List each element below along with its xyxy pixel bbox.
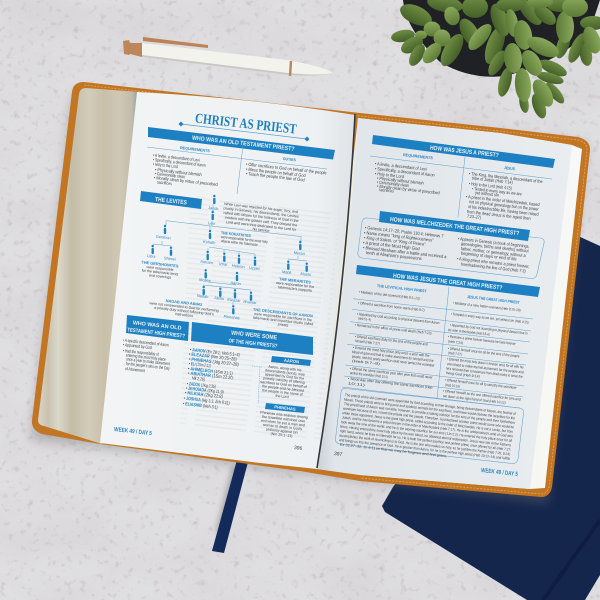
table: levitical vs jesus: he's removed their consciences from dead works to serve the	[446, 367, 523, 379]
table: requirements and duties: • Physically without blemish	[155, 167, 202, 177]
family tree of Levi: Hebron	[232, 263, 245, 269]
panel: melchizedek box: HOW WAS MELCHIZEDEK THE GREAT HIGH PRIEST?	[390, 217, 520, 237]
note: nadab and abihu: NADAB AND ABIHU	[166, 298, 203, 307]
list: high priests: • JEHOIADA (2Kg 11:9)	[186, 386, 224, 395]
table: levitical vs jesus: • Mediator of a new, better covenant (Heb 9:15–28)	[453, 301, 521, 312]
family tree of Levi: Amram	[200, 259, 213, 265]
panel: note box: Moses. These priests were to bring pure and spotless animals for the sacrifices, and these would cleanse the Israelites for the	[344, 398, 515, 420]
table: requirements and jesus: • The King, the Messiah, a descendant of the	[469, 171, 543, 184]
panel: aaron: appointed by God for the	[265, 372, 304, 381]
table: levitical vs jesus: 10:11)	[348, 382, 365, 387]
family tree of Levi: Jacob	[208, 205, 219, 211]
panel: aaron: AARON	[284, 358, 299, 364]
list: high priests: • HILKIAH (2Kg 22:8)	[185, 390, 223, 399]
table: requirements and jesus: • Ceremonially clean	[377, 180, 409, 188]
table: requirements and jesus: sacrifices	[379, 187, 395, 194]
table: requirements and duties: • Teach the people the law of God	[246, 171, 305, 183]
list: high priests: • ELI (1Sm 2:11)	[189, 361, 211, 368]
panel: left page content	[114, 112, 335, 452]
list: high priests: • ELEAZAR (Nm 20:25–28)	[189, 352, 237, 362]
list: high priest duties	[123, 338, 171, 373]
table: requirements and jesus: • Tested in every way as we are	[472, 186, 522, 197]
table: requirements and jesus: • Physically without blemish	[377, 176, 424, 186]
table: levitical vs jesus: people, and this yearly sacrifice could never perfect the worshiper	[352, 355, 435, 368]
note: merarites: THE MERARITES	[279, 276, 311, 285]
panel: note box: Ex 32:27–32; Jn 4:1) so that we may be forgiven and find grace.	[340, 443, 448, 458]
plant pot	[403, 0, 600, 77]
banner: old testament high priest	[126, 315, 189, 341]
panel: melchizedek box: • Blessed Abraham after a battle and received a	[363, 245, 447, 259]
family tree of Levi: Mahli	[282, 269, 292, 275]
panel: note box: right hand, where he lives to intercede for us. He is both the perfect sacrifice and perfect priest, once offered for all (Heb 7:27;	[340, 429, 511, 452]
table: levitical vs jesus: perfect the worshiper (Heb 10:1)	[350, 371, 388, 379]
list: high priests: Mk 2:26)	[192, 376, 205, 382]
table: levitical vs jesus: • Entered the most holy place in heaven once for all with his	[447, 357, 524, 369]
family tree of Levi: Uzziel	[249, 265, 260, 271]
footer: right: WEEK 49 / DAY 5	[481, 468, 519, 478]
table: levitical vs jesus: • Offered a sacrifice from home users (Heb 9:7)	[358, 301, 425, 312]
panel: melchizedek box: foreshadowing the line of God (Heb 7:3)	[461, 262, 526, 274]
list: high priests: • JOSHUA (Hg 1:1; Zch 6:11)	[184, 396, 230, 406]
page number: left: 396	[294, 445, 303, 452]
panel: note box: The priests of the old covenant were appointed by God according to their lineage, being descendants of Moses, the brother of	[345, 393, 516, 416]
note: kohathites	[221, 230, 268, 247]
table: levitical vs jesus: JESUS THE GREAT HIGH PRIEST	[467, 294, 520, 305]
table: levitical vs jesus: (Heb 7:24)	[448, 340, 463, 345]
panel: note box: took away the sins of the world, and he is the atoning sacrifice for our sins (1Jn 2:2). He entered the holy place once for all	[341, 420, 512, 443]
table: requirements and jesus: • Holy to the Lord	[375, 171, 405, 179]
table: requirements and duties: • Ceremonially clean	[155, 171, 185, 179]
panel: phinehas: woman to death in God's	[263, 423, 303, 431]
banner: who were high priests	[191, 322, 313, 355]
title rule with diamonds	[178, 122, 310, 142]
panel: aaron: priestly ministry of offering	[263, 376, 305, 385]
table: requirements and duties: • Morally clean by virtue of prescribed	[154, 175, 218, 187]
list: high priest duties: • A specific descendant of Aaron	[123, 338, 169, 348]
panel: aaron: the Lord	[275, 394, 289, 399]
note: kohathites: objects within the Tabernacle	[221, 239, 258, 247]
panel: melchizedek box: • A king-priest who remains a priest forever,	[457, 256, 530, 269]
panel: phinehas: evil when he put a man and	[261, 419, 305, 427]
panel: melchizedek box: • Appears in Genesis (a book of beginnings,	[458, 236, 530, 249]
panel: melchizedek box: • Name means "king of Righteousness"	[364, 230, 434, 243]
panel: melchizedek box: father, mother, or genealogy, without a	[461, 246, 526, 258]
family tree of Levi	[147, 196, 311, 320]
note: descendants of aaron: tabernacle and important rituals called	[253, 316, 313, 326]
panel: melchizedek box: beginning of days or end of life	[461, 251, 517, 262]
panel: note box: unlike those appointed. Jesus is the great high priest, called according to the order of Melchizedek. He is not a Levite, but from	[342, 411, 513, 434]
paragraph: levites: his service	[252, 227, 270, 233]
left page	[100, 92, 355, 469]
family tree of Levi: Mushi	[300, 271, 311, 277]
banner: the levites	[140, 191, 202, 209]
list: high priest duties: entering the most holy place	[126, 353, 166, 362]
book cover: orange leather	[32, 82, 590, 497]
ribbon bookmark	[212, 460, 248, 553]
banner: great high priest	[356, 265, 540, 297]
table: requirements and duties: DUTIES	[283, 156, 297, 162]
paragraph: levites: cruelty in Genesis, his descendants, the Levites	[223, 206, 299, 219]
table: requirements and jesus: of his indestructible life, having been raised	[468, 204, 539, 217]
note: descendants of aaron	[253, 307, 313, 328]
family tree of Levi: Izhar	[219, 261, 229, 267]
table: requirements and jesus: • A levite, a descendant of Levi	[375, 161, 427, 172]
family tree of Levi: Libni	[147, 253, 156, 259]
panel: melchizedek box: • Genesis 14:17–20; Psalm 110:4; Hebrews 7	[365, 225, 444, 239]
panel: melchizedek box: • King of Salem, or "King of Peace"	[364, 235, 426, 247]
panel: phinehas: Phinehas was zealous among	[260, 410, 308, 420]
panel: melchizedek box: tenth of Abraham's possessions	[366, 250, 423, 261]
family tree of Levi: Levi	[208, 220, 216, 226]
note: kohathites: were responsible for the most holy	[221, 235, 268, 244]
table: levitical vs jesus: • Offered sacrifices daily for the sins of the people and	[355, 335, 428, 346]
panel: note box: Judah, and he has become a priest forever in the order of Melchizedek (Heb 7:17). He is the unblemished Lamb of God who	[342, 416, 513, 438]
family tree of Levi: Aaron	[230, 280, 241, 286]
banner: who were high priests: OF THE HIGH PRIESTS?	[228, 338, 278, 350]
family tree of Levi: Ithamar	[243, 299, 258, 305]
panel: right page content	[334, 135, 555, 478]
table: levitical vs jesus: (Heb 5:1–4)	[358, 317, 371, 322]
table: requirements and jesus: • Specifically, a descendant of Aaron	[375, 166, 435, 178]
paragraph: levites: incident with the golden calf. They obeyed the	[225, 216, 297, 227]
family tree of Levi: Abihu	[214, 295, 225, 301]
family tree of Levi: Eleazar	[227, 297, 242, 303]
dashed connector lines	[252, 366, 263, 404]
panel: aaron: descendants (sons), was	[265, 368, 305, 377]
footer: left: WEEK 49 / DAY 5	[114, 427, 153, 437]
list: high priest duties: once a year to make atonement	[126, 357, 171, 366]
panel: aaron: the people in the name of	[262, 388, 303, 397]
table: requirements and duties	[147, 138, 327, 194]
panel: melchizedek box	[358, 211, 544, 279]
list: high priest duties: of Atonement	[125, 366, 146, 373]
list: high priest duties: • Appointed by God	[123, 342, 152, 350]
table: requirements and duties: • Holy to the Lord	[153, 162, 178, 169]
list: high priests: • AARON (Ex 28:1; Heb 5:1–4)	[190, 347, 240, 358]
panel: phinehas: (Nm 25:1–13)	[270, 432, 293, 438]
table: levitical vs jesus: • Offered the same sacrifices year after year that could never	[350, 367, 433, 380]
panel: note box: accomplishes the work of reconciling us to God. He is the one who makes us holy, so he justifies the Father (Heb 7:25; 9:24)	[339, 434, 510, 456]
list: high priests: • AHIMELECH (1Sm 21:1)	[188, 366, 233, 376]
table: levitical vs jesus: the order of Melchizedek (Heb 5:5–6)	[448, 328, 490, 337]
table: levitical vs jesus: • Appointed by God according to physical descent from Aaron	[357, 312, 440, 325]
panel: note box: and brings us into the presence of God. He is greater than Aaron, for he is the perfect high priest (Heb 10:12–14) and fulfills	[339, 438, 510, 461]
list: high priest duties: for the people's sins on the Day	[126, 361, 171, 371]
table: requirements and jesus: 7:23–27)	[467, 214, 482, 220]
note: gershonites	[141, 259, 179, 280]
table: levitical vs jesus: • Offered himself once for all to sanctify the worshiper	[445, 378, 517, 390]
right page	[317, 118, 572, 489]
panel: note box	[335, 388, 524, 464]
table: levitical vs jesus: (Heb 10:10)	[445, 383, 460, 389]
note: merarites: tabernacle's supports	[278, 285, 312, 293]
banner: old testament priest	[148, 127, 335, 160]
table: levitical vs jesus: • Entered the most holy place only once a year with the	[353, 346, 430, 358]
table: requirements and jesus: not on physical genealogy but on the power	[469, 199, 539, 212]
note: kohathites: THE KOHATHITES	[221, 230, 251, 238]
note: nadab and abihu	[149, 298, 219, 318]
list: high priest duties: • Had the responsibility of	[123, 348, 160, 357]
table: levitical vs jesus	[342, 283, 533, 408]
paragraph: levites: rallied with Moses for the holiness of God in the	[223, 211, 299, 223]
table: levitical vs jesus: • Appointed by God not according to physical descent but in	[450, 323, 528, 336]
book shadow	[30, 92, 588, 504]
table: requirements and duties: sacrifices	[157, 180, 173, 186]
note: gershonites: THE GERSHONITES	[141, 259, 179, 269]
list: high priests: • ELIASHIB (Neh 3:1)	[183, 401, 218, 410]
bleed-through text	[180, 195, 340, 440]
panel: note box: times. Having entered the most holy place by his own blood, he obtained eternal redemption. Jesus now sits at the Father's	[340, 425, 511, 447]
table: levitical vs jesus: living God (Heb 9:14)	[446, 371, 480, 379]
banner: how was jesus a priest: HOW WAS JESUS A PRIEST?	[430, 146, 499, 159]
page edges: left stack	[38, 88, 140, 444]
paragraph: levites	[223, 202, 299, 233]
note: gershonites: were responsible	[146, 265, 174, 272]
table: levitical vs jesus: (Heb 9:7–9)	[352, 359, 380, 366]
list: high priests: • PHINEHAS (Jdg 20:27–28)	[189, 357, 239, 367]
table: levitical vs jesus: • Remains a priest forever because he lives forever	[448, 335, 516, 346]
gutter	[317, 114, 355, 468]
table: levitical vs jesus: sat down at the right hand of God (Heb 10:12)	[443, 394, 506, 405]
table: levitical vs jesus: own blood to make eternal atonement for the people and	[447, 362, 524, 374]
family tree of Levi: Moses	[199, 277, 211, 283]
panel: phinehas	[260, 403, 308, 438]
family tree of Levi: Phinehas	[223, 314, 240, 320]
family tree of Levi: Merari	[294, 250, 305, 256]
note: nadab and abihu: instructions	[175, 312, 193, 318]
table: levitical vs jesus: • Tempted in every way as we are, yet without sin (Heb 4:15)	[451, 312, 529, 325]
banner: great high priest: HOW WAS JESUS THE GREAT HIGH PRIEST?	[393, 274, 503, 292]
table: requirements and jesus: REQUIREMENTS	[403, 152, 433, 160]
paragraph: levites: Lord and were thus dedicated to the Lord for	[226, 220, 297, 232]
panel: phinehas: the Israelites with their own	[262, 415, 305, 423]
table: requirements and jesus: • Morally clean by virtue of prescribed	[377, 184, 440, 195]
table: requirements and duties: • Specifically, a descendant of Aaron	[153, 157, 206, 168]
table: levitical vs jesus: • Offered himself as the one offered sacrifice for sins and	[443, 389, 521, 402]
panel: aaron: sacrifices to God on behalf of	[260, 380, 307, 389]
table: requirements and jesus: from the dead Jesus is the agent then	[467, 209, 531, 221]
panel: phinehas: PHINEHAS	[274, 404, 296, 412]
table: requirements and duties: • Offer sacrifices to God on behalf of the people	[246, 162, 327, 175]
banner: who were high priests: WHO WERE SOME	[231, 330, 277, 342]
note: nadab and abihu: a priestly duty without following God's	[154, 306, 214, 316]
note: merarites: were responsible for the	[276, 281, 314, 289]
banner: old testament high priest: WHO WAS AN OLD	[132, 320, 182, 332]
table: levitical vs jesus: • Offered himself once for all for the sins of the people	[448, 347, 520, 358]
banner: old testament priest: WHO WAS AN OLD TESTAMENT PRIEST?	[192, 136, 295, 153]
right page stack	[317, 118, 582, 489]
list: high priests: • ZADOK (1Kg 2:35)	[187, 381, 216, 389]
table: levitical vs jesus: • Remained in the office of priest until death (Heb 7:23)	[355, 323, 432, 335]
banner: old testament high priest: TESTAMENT HIGH PRIEST?	[127, 327, 185, 340]
panel: aaron	[260, 356, 311, 399]
list: high priests	[183, 347, 240, 410]
table: levitical vs jesus: himself (Heb 7:27)	[355, 339, 380, 346]
list: high priests: • ABIATHAR (1Sm 22:20;	[188, 371, 234, 381]
table: requirements and jesus: tribe of Judah (Heb 7:14)	[472, 176, 513, 185]
family tree of Levi: Gershon	[156, 234, 171, 240]
table: requirements and jesus	[370, 152, 552, 221]
panel: note box: worshiper because of sin, in both the priests and the people. Therefore, God declared another priest would come who would be	[343, 407, 514, 429]
table: requirements and jesus: • Holy to the Lord (Heb 4:15)	[469, 181, 512, 191]
note: descendants of aaron: THE DESCENDANTS OF AARON	[253, 307, 313, 318]
table: requirements and jesus: JESUS	[504, 165, 516, 171]
banner: the levites: THE LEVITES	[155, 197, 187, 206]
table: requirements and duties: REQUIREMENTS	[180, 145, 210, 153]
family tree of Levi: Kohath	[203, 239, 216, 245]
panel: melchizedek box: • A priest of the Most High God	[363, 240, 420, 251]
note: descendants of aaron: priests	[278, 322, 289, 328]
table: requirements and duties: • Bless the people on behalf of God	[246, 167, 306, 178]
family tree of Levi: Shimei	[164, 255, 176, 262]
family tree of Levi: Nadab	[197, 293, 209, 299]
plant leaves	[390, 0, 600, 120]
panel: aaron: the people and he blessed	[262, 384, 304, 393]
navy notebook	[382, 236, 600, 600]
panel: melchizedek box: genealogies, births and deaths) without	[461, 241, 530, 254]
table: levitical vs jesus: blood of goat and bull to make atonement for himself and the	[352, 350, 434, 363]
title: CHRIST AS PRIEST	[194, 112, 298, 138]
table: levitical vs jesus: • Mediator of the old covenant (Heb 8:1–13)	[359, 290, 420, 301]
table: levitical vs jesus: THE LEVITICAL HIGH PRIEST	[377, 283, 428, 294]
table: requirements and duties: • A levite, a descendant of Levi	[153, 153, 200, 163]
paragraph: levites: While Levi was rejected for his anger, fury, and	[224, 202, 298, 214]
table: requirements and jesus: • A priest in the order of Melchizedek, based	[466, 194, 540, 207]
table: levitical vs jesus: (Heb 7:27)	[448, 351, 462, 357]
note: descendants of aaron: were responsible for sacrifices in the	[254, 312, 312, 322]
note: merarites	[276, 276, 314, 293]
panel: aaron: Aaron, along with his	[268, 365, 302, 372]
panel: note box: The priesthood of Aaron was not able, however, to provide a lasting solution for the sins of the people and their forefathers	[344, 402, 515, 425]
note: gershonites: for the tabernacle tents	[142, 268, 179, 277]
pen	[123, 37, 333, 76]
note: nadab and abihu: were not consecrated to God for performing	[149, 301, 219, 313]
table: levitical vs jesus: • Stood day after day offering the same sacrifices (Heb	[348, 377, 433, 390]
panel: phinehas: jealousy against sin	[265, 427, 298, 435]
table: requirements and jesus: yet without sin	[475, 190, 500, 198]
page number: right: 397	[334, 451, 343, 458]
note: gershonites: and coverings	[149, 273, 172, 280]
banner: how was jesus a priest	[372, 135, 555, 168]
